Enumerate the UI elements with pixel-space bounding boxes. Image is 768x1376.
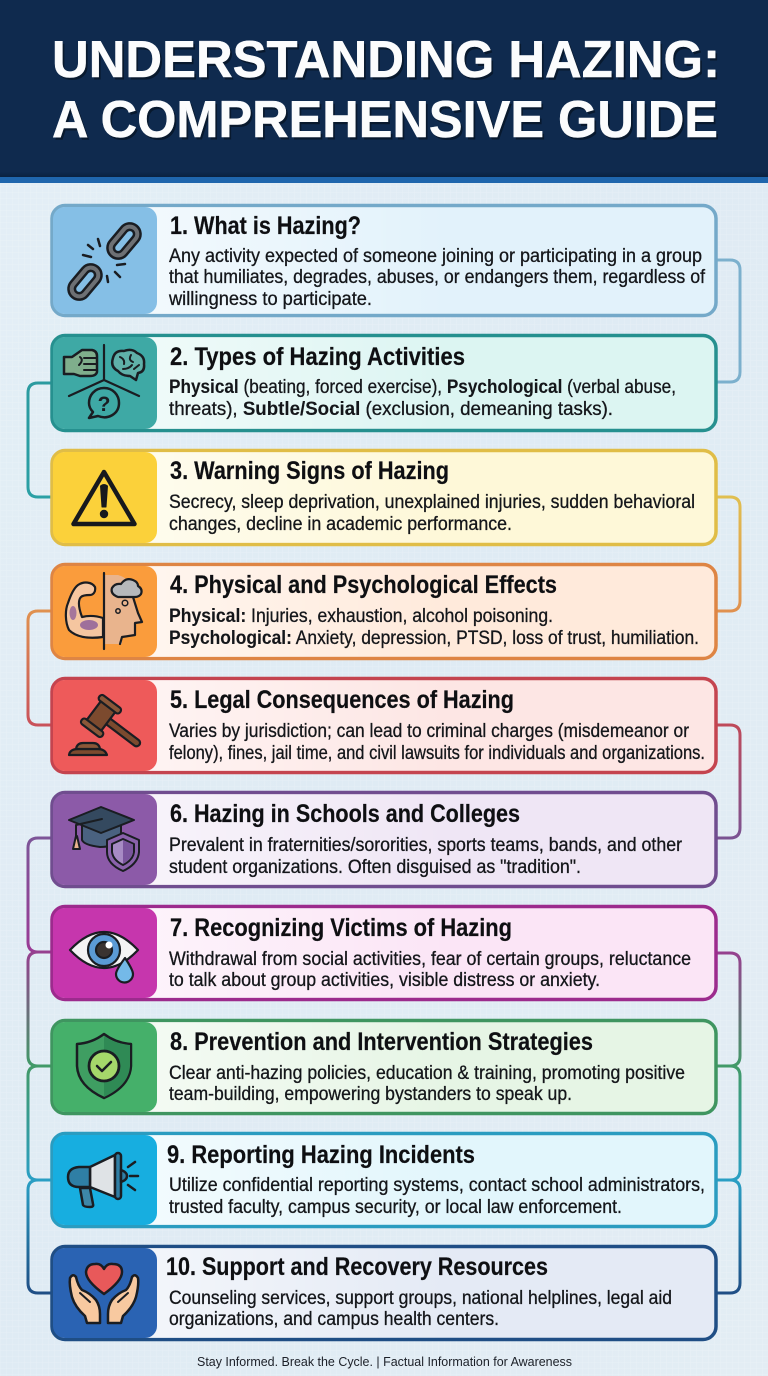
heading: 4. Physical and Psychological Effects (170, 571, 557, 599)
header banner (0, 0, 768, 183)
panel: 2 Types of Hazing (52, 336, 716, 430)
body text: Physical (beating, forced exercise), Psychological (verbal abuse, (169, 377, 676, 398)
connector: 6 to 7 (28, 838, 51, 952)
panel: 3 Warning Signs (52, 450, 716, 544)
body text: Withdrawal from social activities, fear of certain groups, reluctance (169, 949, 691, 970)
icon tile: types (53, 337, 157, 429)
body text (169, 1288, 672, 1330)
body text (169, 377, 676, 420)
footer: Stay Informed. Break the Cycle. | Factual Information for Awareness (197, 1354, 572, 1369)
body text: Any activity expected of someone joining or participating in a group (169, 246, 702, 267)
body text: Clear anti-hazing policies, education & training, promoting positive (169, 1063, 685, 1084)
title: UNDERSTANDING HAZING: (54, 34, 722, 92)
icon: heart and hands (70, 1264, 138, 1323)
body text: that humiliates, degrades, abuses, or endangers them, regardless of (169, 267, 706, 288)
body text: felony), fines, jail time, and civil lawsuits for individuals and organizations. (169, 743, 705, 764)
icon: fist, brain and question (64, 345, 144, 418)
body text: threats), Subtle/Social (exclusion, demeaning tasks). (169, 399, 613, 420)
connector: 1 to 2 (717, 260, 740, 382)
title (52, 31, 722, 152)
icon: fist, brain and question: ? (98, 393, 110, 416)
connector: 9 to 10 right (717, 1180, 740, 1293)
icon: megaphone (68, 1153, 138, 1207)
body text (168, 246, 706, 310)
connector: 7 to 8 right (717, 953, 740, 1066)
connector: 3 to 4 (717, 497, 740, 611)
body text: trusted faculty, campus security, or local law enforcement. (169, 1197, 622, 1218)
heading: 7. Recognizing Victims of Hazing (170, 914, 512, 942)
panel: 1 What is Hazing (52, 206, 716, 316)
body text: team-building, empowering bystanders to speak up. (169, 1084, 572, 1105)
icon: gavel (69, 694, 150, 759)
heading: 10. Support and Recovery Resources (166, 1253, 548, 1281)
body text: Secrecy, sleep deprivation, unexplained injuries, sudden behavioral (169, 492, 695, 513)
connector: 7 to 8 left (28, 952, 51, 1066)
body text (169, 1175, 705, 1218)
connector: 5 to 6 (717, 725, 740, 838)
heading: 6. Hazing in Schools and Colleges (170, 800, 520, 828)
panel: 4 Physical and Psychological Effects (52, 564, 716, 658)
body text: Physical: Injuries, exhaustion, alcohol poisoning. (169, 606, 553, 627)
body text: to talk about group activities, visible distress or anxiety. (169, 970, 600, 991)
icon: shield with check (77, 1034, 131, 1098)
connector: 8 to 9 right (717, 1066, 740, 1180)
body text (169, 1063, 685, 1105)
heading: 8. Prevention and Intervention Strategies (170, 1028, 593, 1056)
icon: eye with tear (70, 932, 138, 982)
body text: Varies by jurisdiction; can lead to criminal charges (misdemeanor or (169, 721, 690, 742)
icon: broken chain (69, 224, 140, 299)
icon tile: prevention (53, 1022, 157, 1112)
connector: 2 to 3 (28, 383, 51, 497)
title: A COMPREHENSIVE GUIDE (52, 91, 718, 149)
body text (169, 835, 683, 878)
icon: warning triangle (74, 472, 134, 524)
body text: Utilize confidential reporting systems, contact school administrators, (169, 1175, 705, 1196)
icon tile: reporting (53, 1135, 157, 1225)
heading: 9. Reporting Hazing Incidents (167, 1141, 475, 1169)
body text: organizations, and campus health centers. (169, 1309, 499, 1330)
panel: 10 Support and Recovery (52, 1246, 716, 1340)
connector: 9 to 10 left (28, 1180, 51, 1293)
icon tile: legal (53, 680, 157, 771)
body text: Psychological: Anxiety, depression, PTSD, loss of trust, humiliation. (169, 628, 699, 649)
panel: 6 Schools and Colleges (52, 792, 716, 886)
body text (169, 606, 699, 649)
heading: 1. What is Hazing? (170, 212, 361, 240)
icon: arm and head (66, 573, 142, 649)
title: UNDERSTANDING HAZING: (52, 31, 720, 89)
icon tile: chain (53, 207, 157, 314)
heading: 3. Warning Signs of Hazing (170, 457, 449, 485)
icon tile: effects (53, 566, 157, 657)
connector: 4 to 5 (28, 611, 51, 725)
icon tile: warning (53, 452, 157, 543)
body text (169, 492, 695, 535)
icon tile: schools (53, 794, 157, 885)
icon tile: support (53, 1248, 157, 1338)
body text: willingness to participate. (168, 289, 372, 310)
body text (169, 949, 691, 991)
body text: changes, decline in academic performance. (169, 514, 512, 535)
icon: graduation cap and shield (69, 807, 139, 871)
panel: 9 Reporting (52, 1134, 716, 1226)
title: A COMPREHENSIVE GUIDE (54, 94, 720, 152)
heading: 5. Legal Consequences of Hazing (170, 686, 514, 714)
icon tile: victims (53, 908, 157, 998)
panel: 8 Prevention (52, 1020, 716, 1114)
connector: 8 to 9 left (28, 1066, 51, 1180)
body text: Counseling services, support groups, national helplines, legal aid (169, 1288, 672, 1309)
panel: 5 Legal Consequences (52, 678, 716, 772)
body text: Prevalent in fraternities/sororities, sports teams, bands, and other (169, 835, 683, 856)
body text (169, 721, 705, 764)
body text: student organizations. Often disguised as "tradition". (169, 857, 581, 878)
heading: 2. Types of Hazing Activities (170, 343, 465, 371)
panel: 7 Recognizing Victims (52, 906, 716, 1000)
